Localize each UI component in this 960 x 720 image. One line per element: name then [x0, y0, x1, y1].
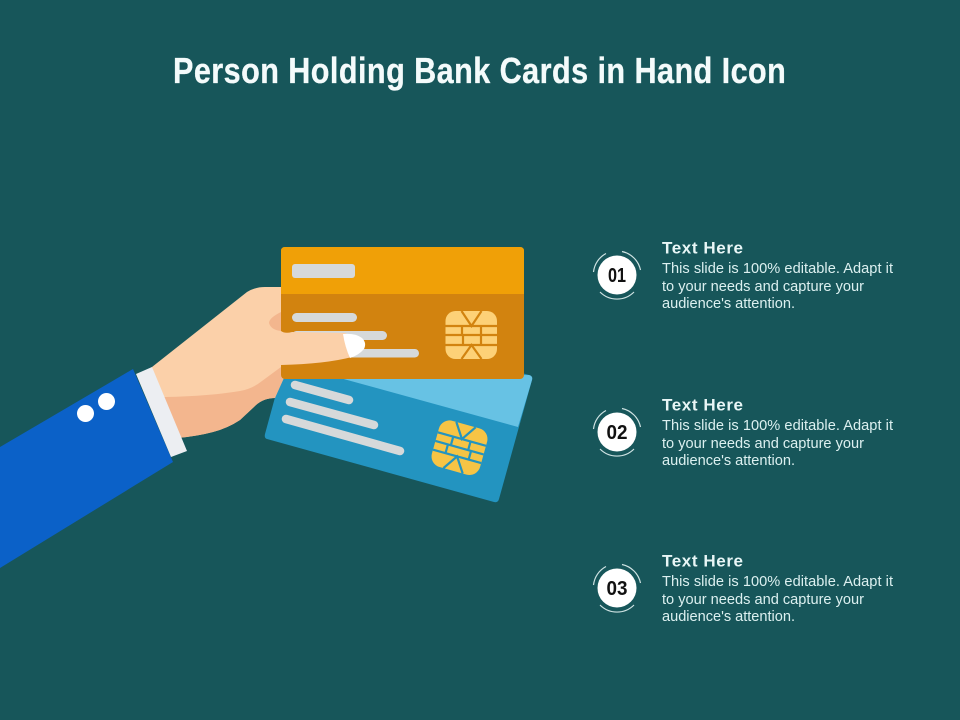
badge 01: 01: [608, 265, 626, 287]
orange card name pill: [292, 264, 355, 278]
hand: wrist and palm: [148, 287, 295, 438]
fingernail: [343, 334, 365, 358]
item 03: [594, 552, 893, 625]
blue card chip: [429, 418, 490, 478]
title: Person Holding Bank Cards in Hand Icon: [173, 52, 786, 92]
blue bank card: [265, 311, 532, 502]
badge 01: [594, 252, 640, 299]
item 02: [594, 396, 893, 469]
badge 03: 03: [606, 578, 628, 600]
item 01: [594, 238, 893, 312]
text block 01: to your needs and capture your: [662, 279, 864, 295]
sleeve buttons: [77, 393, 115, 422]
text block 02: [662, 396, 893, 469]
blue card text lines: [286, 385, 400, 451]
text block 02: This slide is 100% editable. Adapt it: [662, 418, 893, 434]
text block 03: [662, 552, 893, 625]
orange bank card: [281, 247, 524, 379]
text block 03: Text Here: [662, 552, 743, 570]
badge 03: [594, 564, 640, 612]
text block 01: [662, 238, 893, 312]
text block 03: This slide is 100% editable. Adapt it: [662, 574, 893, 590]
text block 02: audience's attention.: [662, 453, 795, 469]
text block 01: This slide is 100% editable. Adapt it: [662, 261, 893, 277]
sleeve: [0, 369, 173, 568]
orange card text lines: [292, 313, 419, 358]
thumb crease: [269, 312, 281, 331]
finger: [270, 331, 365, 365]
text block 03: audience's attention.: [662, 609, 795, 625]
badge 02: 02: [606, 422, 628, 444]
text block 03: to your needs and capture your: [662, 592, 864, 608]
text block 02: Text Here: [662, 396, 743, 414]
badge 02: [594, 408, 640, 456]
text block 02: to your needs and capture your: [662, 436, 864, 452]
orange card chip: [446, 311, 497, 359]
text block 01: audience's attention.: [662, 296, 795, 312]
text block 01: Text Here: [662, 238, 743, 258]
illustration: hand holding bank cards: [0, 247, 532, 568]
shirt cuff: [136, 367, 187, 457]
